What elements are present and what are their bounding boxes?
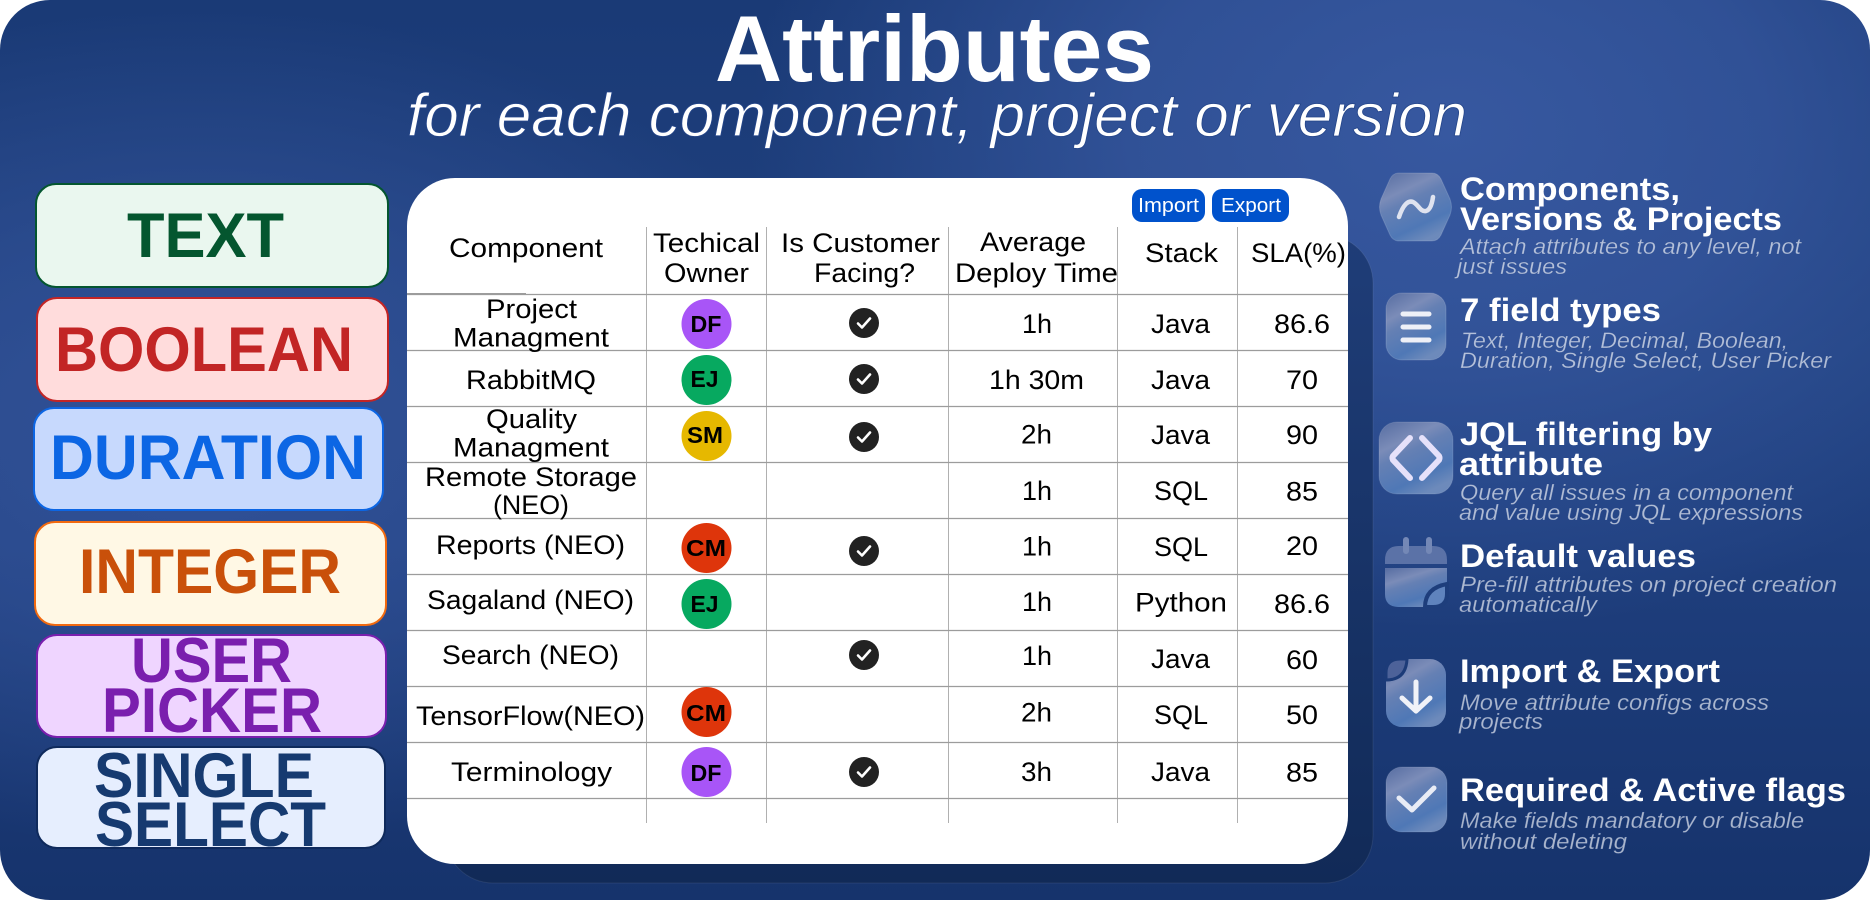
table header: Component	[449, 233, 604, 263]
avatar: EJ: EJ	[690, 591, 718, 617]
customer facing checks column	[849, 308, 879, 787]
deploy time column: 1h	[1022, 476, 1052, 506]
SLA column: 85	[1286, 476, 1318, 506]
SLA column: 90	[1286, 420, 1318, 450]
avatar: DF	[682, 299, 732, 349]
feature: default values: automatically	[1459, 592, 1599, 617]
pill: boolean	[37, 298, 388, 401]
deploy time column: 3h	[1021, 757, 1052, 787]
owner avatars column	[682, 299, 732, 797]
avatar: CM	[682, 687, 732, 737]
feature: import and export: projects	[1458, 709, 1543, 734]
deploy time column: 1h	[1022, 587, 1052, 617]
feature: components, versions and projects: Attach attributes to any level, not	[1458, 234, 1803, 259]
SLA column: 50	[1286, 700, 1318, 730]
avatar: CM: CM	[686, 535, 726, 561]
feature: import and export: Import & Export	[1460, 653, 1720, 689]
avatar: SM: SM	[687, 422, 723, 448]
deploy time column: 2h	[1021, 420, 1052, 450]
SLA column: 86.6	[1274, 589, 1330, 619]
deploy time column: 1h	[1022, 641, 1052, 671]
feature: field types	[1386, 292, 1833, 373]
feature: default values: Default values	[1460, 538, 1696, 574]
feature: field types: 7 field types	[1460, 292, 1661, 328]
pill: single select: SELECT	[95, 790, 326, 860]
stack column: Java	[1151, 757, 1211, 787]
table header: Techical	[653, 228, 760, 258]
avatar: DF: DF	[690, 760, 722, 786]
stack column: Python	[1135, 588, 1227, 618]
feature: import and export: Move attribute configs across	[1460, 690, 1769, 715]
feature: required and active flags	[1386, 767, 1846, 854]
avatar: CM	[682, 523, 732, 573]
SLA column: 70	[1286, 365, 1318, 395]
SLA column: 86.6	[1274, 309, 1330, 339]
SLA column: 20	[1286, 531, 1318, 561]
component names column: Reports (NEO)	[436, 530, 625, 560]
stack column: SQL	[1154, 532, 1208, 562]
pill: single select	[37, 741, 385, 860]
component names column: Search (NEO)	[442, 640, 619, 670]
stack column: SQL	[1154, 700, 1208, 730]
feature: components, versions and projects: Components,	[1460, 171, 1680, 207]
avatar: EJ	[682, 579, 732, 629]
table header: SLA(%)	[1251, 238, 1346, 268]
avatar: SM	[682, 411, 732, 461]
feature: default values	[1385, 538, 1837, 617]
feature: field types: Text, Integer, Decimal, Boolean,	[1461, 328, 1788, 353]
table header: Stack	[1145, 238, 1219, 268]
feature: JQL filtering: Query all issues in a component	[1460, 480, 1795, 505]
feature: JQL filtering: JQL filtering by	[1460, 416, 1712, 452]
table card shadow	[445, 235, 1373, 883]
feature: JQL filtering: attribute	[1459, 446, 1603, 482]
deploy time column: 1h	[1022, 532, 1052, 562]
pill: user picker: PICKER	[102, 676, 322, 746]
stack column: SQL	[1154, 476, 1208, 506]
icon: hexagon wave	[1380, 173, 1452, 241]
feature: required and active flags: Make fields mandatory or disable	[1460, 808, 1804, 833]
pill: text	[36, 184, 388, 287]
table header: Average	[980, 227, 1086, 257]
component names column: Managment	[453, 322, 610, 352]
component names column	[416, 294, 645, 787]
component names column: Terminology	[451, 757, 613, 787]
feature: required and active flags: without deleting	[1460, 829, 1628, 854]
table grid	[407, 227, 1348, 823]
button: export	[1212, 189, 1289, 222]
pill: duration: DURATION	[50, 423, 366, 493]
feature: default values: Pre-fill attributes on project creation	[1460, 572, 1837, 597]
table header: Facing?	[814, 258, 915, 288]
avatar: EJ	[682, 355, 732, 405]
SLA column	[1274, 309, 1330, 788]
icon: list	[1386, 293, 1446, 360]
feature: components, versions and projects: Versions & Projects	[1460, 201, 1782, 237]
pill: integer: INTEGER	[79, 537, 341, 607]
pill: text: TEXT	[127, 201, 284, 271]
pill: duration	[34, 408, 383, 510]
stack column: Java	[1151, 644, 1211, 674]
component names column: RabbitMQ	[466, 365, 596, 395]
component names column: Managment	[453, 432, 610, 462]
SLA column: 60	[1286, 645, 1318, 675]
panel: attribute table	[407, 178, 1348, 864]
deploy time column: 1h 30m	[989, 365, 1084, 395]
feature: JQL filtering	[1379, 416, 1803, 525]
icon: document download	[1386, 659, 1446, 727]
avatar: DF: DF	[690, 311, 722, 337]
deploy time column: 2h	[1021, 698, 1052, 728]
button: import: Import	[1138, 195, 1199, 217]
button: import	[1132, 189, 1205, 222]
pill: boolean: BOOLEAN	[55, 315, 353, 385]
feature: field types: Duration, Single Select, User Picker	[1460, 348, 1833, 373]
component names column: (NEO)	[493, 490, 569, 520]
stack column: Java	[1151, 420, 1211, 450]
SLA column: 85	[1286, 758, 1318, 788]
deploy time column: 1h	[1022, 309, 1052, 339]
deploy time column	[989, 309, 1084, 787]
icon: calendar	[1385, 540, 1447, 607]
table header: Deploy Time	[955, 258, 1118, 288]
avatar: CM: CM	[686, 700, 726, 726]
button: export: Export	[1221, 195, 1281, 217]
pill: user picker	[37, 626, 386, 746]
component names column: Sagaland (NEO)	[427, 585, 634, 615]
avatar: EJ: EJ	[690, 366, 718, 392]
stack column: Java	[1151, 309, 1211, 339]
feature: components, versions and projects: just issues	[1454, 254, 1567, 279]
table header: Owner	[664, 258, 749, 288]
table header	[449, 227, 1346, 288]
component names column: TensorFlow(NEO)	[416, 701, 645, 731]
pill: integer	[35, 522, 386, 625]
table header: Is Customer	[781, 228, 940, 258]
icon: check mark	[1386, 767, 1447, 832]
feature: JQL filtering: and value using JQL expressions	[1459, 500, 1803, 525]
feature: import and export	[1386, 653, 1769, 734]
component names column: Quality	[486, 404, 578, 434]
panel: field type pills	[34, 184, 388, 860]
icon: code brackets	[1379, 422, 1453, 494]
table card	[407, 178, 1348, 864]
feature: components, versions and projects	[1380, 171, 1803, 279]
stack column	[1135, 309, 1227, 787]
pill: user picker: USER	[131, 626, 292, 696]
component names column: Project	[486, 294, 578, 324]
feature: required and active flags: Required & Active flags	[1460, 772, 1846, 808]
component names column: Remote Storage	[425, 462, 637, 492]
subtitle: for each component, project or version	[407, 82, 1467, 149]
panel: feature list	[1379, 171, 1846, 854]
pill: single select: SINGLE	[94, 741, 314, 811]
stack column: Java	[1151, 365, 1211, 395]
avatar: DF	[682, 747, 732, 797]
